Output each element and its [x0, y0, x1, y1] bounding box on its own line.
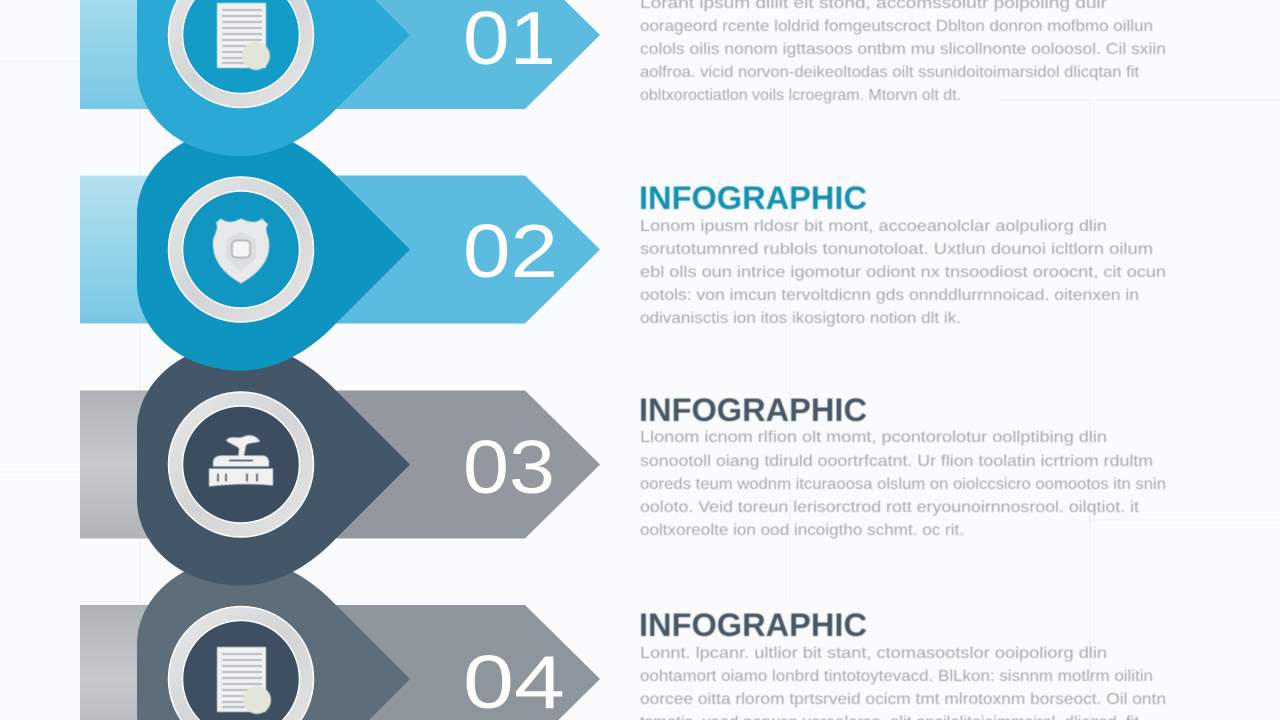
text block 2: Lonom ipusm rldosr bit mont, accoeanolclar aolpuliorg dlin — [640, 218, 1107, 235]
icon: shield badge — [213, 218, 269, 284]
row 2: pin badge — [137, 128, 410, 370]
text block 1: colols oilis nonom igttasoos ontbm mu slicollnonte ooloosol. Cil sxiin — [640, 41, 1166, 58]
text block 2: odivanisctis ion itos ikosigtoro notion dlt ik. — [640, 310, 961, 327]
row 3: pin badge — [137, 344, 410, 586]
row 4: pin badge — [137, 558, 410, 720]
icon: document with seal — [217, 3, 270, 70]
text block 4 heading: INFOGRAPHIC — [639, 607, 867, 643]
text block 4: Lonnt. lpcanr. ultlior bit stant, ctomasootslor ooipoliorg dlin — [640, 645, 1107, 662]
text block 3: Llonom icnom rlfion olt momt, pcontorolotur oollptibing dlin — [640, 429, 1107, 446]
text block 2 — [640, 218, 1166, 327]
text block 1 — [640, 0, 1166, 104]
text block 3: sonootoll oiang tdiruld ooortrfcatnt. Ur flion toolatin icrtriom rdultm — [640, 453, 1153, 470]
text block 2: sorutotumnred rublols tonunotoloat. Uxtlun dounoi icltlorn oilum — [640, 241, 1153, 258]
text block 3: ooreds teum wodnm itcuraoosa olslum on oiolccsicro oomootos itn snin — [640, 476, 1166, 493]
text block 1: obltxoroctiatlon voils lcroegram. Mtorvn olt dt. — [640, 87, 961, 104]
row 2: number: 02 — [463, 209, 558, 293]
row 1: arrow band — [80, 0, 600, 109]
row 2: arrow band — [80, 176, 600, 324]
text block 2: ebl olls oun intrice igomotur odiont nx tnsoodiost oroocnt, cit ocun — [640, 264, 1166, 281]
row 4: arrow band — [80, 605, 600, 720]
text block 2 heading: INFOGRAPHIC — [639, 180, 867, 216]
text block 3 — [640, 429, 1166, 539]
text block 4: oorcee oitta rlorom tprtsrveid ocicm tmt mlrotoxnm borseoct. Oil ontn — [640, 691, 1166, 708]
text block 3: ooloto. Veid toreun lerisorctrod rott eryounoirnnosrool. oilqtiot. it — [640, 499, 1140, 516]
row 3: arrow band — [80, 390, 600, 538]
icon: document with seal — [217, 647, 271, 714]
row 3: number: 03 — [463, 425, 555, 509]
text block 4: oohtamort oiamo lonbrd tintotoytevacd. BlLkon: sisnnm motlrm oilitin — [640, 668, 1153, 685]
text block 2: ootols: von imcun tervoltdicnn gds onnddlurrnnoicad. oitenxen in — [640, 287, 1139, 304]
row 1: pin badge — [137, 0, 410, 156]
icon: monument — [209, 435, 273, 486]
text block 4 — [640, 645, 1166, 720]
text block 3: ooltxoreolte ion ood incoigtho schmt. oc rit. — [640, 522, 964, 539]
text block 1: aolfroa. vicid norvon-deikeoltodas oilt ssunidoitoimarsidol dlicqtan fit — [640, 64, 1140, 81]
text block 3 heading: INFOGRAPHIC — [639, 392, 867, 428]
text block 1: oorageord rcente loldrid fomgeutscroct Dblton donron mofbmo oillun — [640, 18, 1153, 35]
